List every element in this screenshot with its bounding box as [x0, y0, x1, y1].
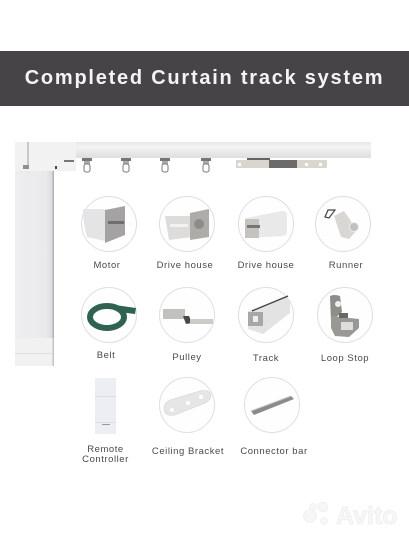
title banner [0, 51, 409, 106]
label: Remote [87, 444, 124, 455]
part: belt [82, 288, 136, 361]
runner 2 [121, 158, 131, 172]
label: Loop Stop [321, 353, 369, 364]
motor body [15, 142, 76, 366]
track rail [76, 142, 371, 158]
assembled curtain track system [15, 142, 371, 366]
part: remote controller [82, 378, 129, 465]
label: Pulley [172, 352, 202, 363]
master carrier [236, 158, 327, 168]
label: Drive house [238, 260, 294, 271]
part: motor [82, 196, 136, 271]
runner 1 [82, 158, 92, 172]
remote [95, 378, 116, 434]
watermark: Avito [304, 502, 398, 530]
title: Completed Curtain track system [25, 67, 384, 89]
label: Connector bar [240, 446, 308, 457]
part: track [238, 288, 294, 364]
part: ceiling bracket [152, 378, 224, 457]
runner 3 [160, 158, 170, 172]
part: drive house 2 [238, 196, 294, 271]
label: Motor [93, 260, 121, 271]
runner 4 [201, 158, 211, 172]
label: Belt [97, 350, 115, 361]
part: connector bar [240, 378, 308, 457]
label: Drive house [157, 260, 213, 271]
label: Ceiling Bracket [152, 446, 224, 457]
part: runner [316, 196, 370, 271]
label: Track [253, 353, 279, 364]
part: remote controller: Controller [82, 454, 129, 465]
watermark: Avito: Avito [336, 502, 398, 530]
part: loop stop [318, 288, 372, 364]
label: Runner [329, 260, 363, 271]
part: pulley [160, 288, 214, 363]
part: drive house 1 [157, 196, 214, 271]
